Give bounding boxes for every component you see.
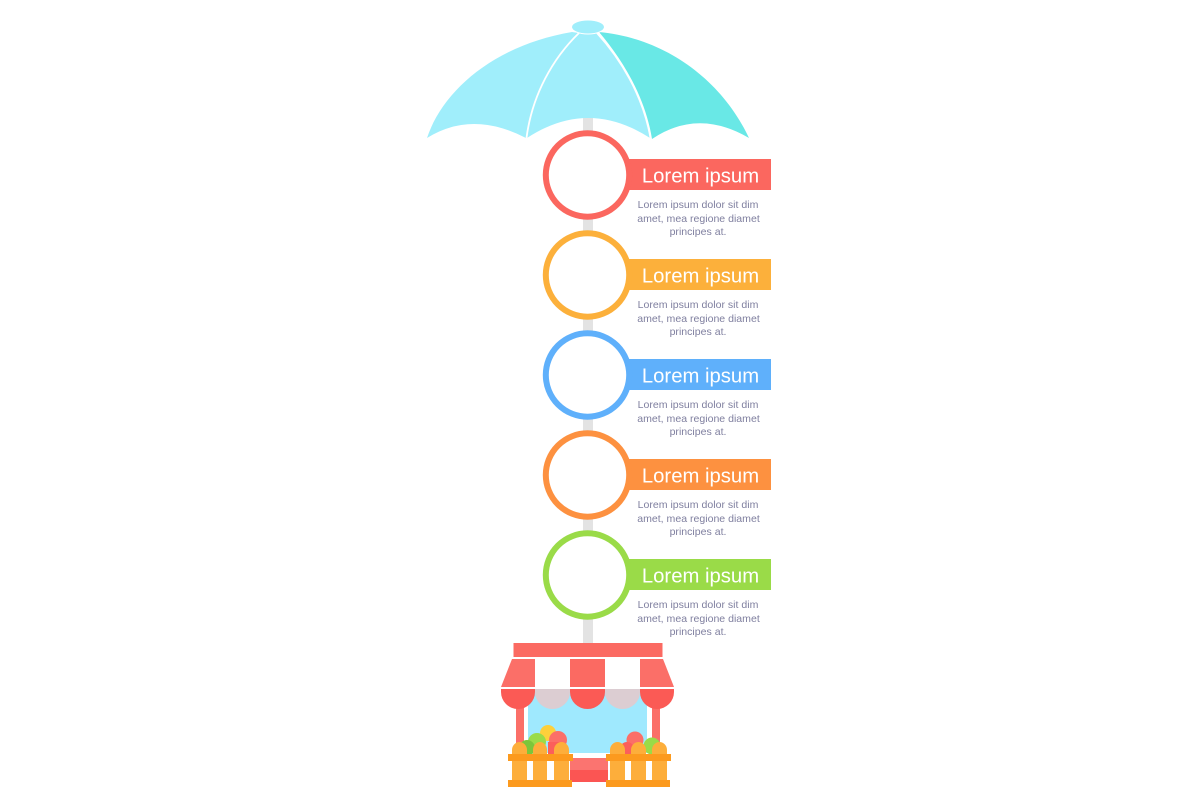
- step 4: [546, 433, 771, 538]
- ring: [546, 333, 629, 417]
- ring: [546, 433, 629, 517]
- umbrella top cap: [572, 20, 604, 34]
- description: principes at.: [670, 326, 726, 338]
- banner: [628, 559, 771, 590]
- description: amet, mea regione diamet: [637, 313, 760, 325]
- description: Lorem ipsum dolor sit dim: [638, 199, 759, 211]
- door step: [570, 758, 608, 782]
- description: principes at.: [670, 626, 726, 638]
- heading: Lorem ipsum: [642, 166, 759, 188]
- umbrella right panel: [599, 32, 749, 139]
- banner: [628, 259, 771, 290]
- umbrella seam left: [526, 33, 579, 138]
- description: Lorem ipsum dolor sit dim: [638, 499, 759, 511]
- step 2: [546, 233, 771, 338]
- right crate: [606, 742, 671, 787]
- description: principes at.: [670, 526, 726, 538]
- description: amet, mea regione diamet: [637, 413, 760, 425]
- heading: Lorem ipsum: [642, 366, 759, 388]
- left crate: [508, 742, 573, 787]
- pole: [583, 110, 593, 645]
- step 1: [546, 133, 771, 238]
- right fruit: [620, 732, 660, 756]
- description: amet, mea regione diamet: [637, 613, 760, 625]
- description: amet, mea regione diamet: [637, 213, 760, 225]
- icon: umbrella: [427, 20, 749, 139]
- heading: Lorem ipsum: [642, 466, 759, 488]
- umbrella centre panel: [527, 33, 650, 138]
- heading: Lorem ipsum: [642, 566, 759, 588]
- description: amet, mea regione diamet: [637, 513, 760, 525]
- window: [528, 690, 647, 753]
- umbrella seam right: [597, 33, 650, 138]
- icon: market stall: [501, 643, 674, 787]
- step 3: [546, 333, 771, 438]
- description: Lorem ipsum dolor sit dim: [638, 599, 759, 611]
- step 5: [546, 533, 771, 638]
- heading: Lorem ipsum: [642, 266, 759, 288]
- awning stripes: [501, 659, 535, 687]
- umbrella left panel: [427, 32, 579, 138]
- awning scallops: [501, 689, 535, 709]
- banner: [628, 159, 771, 190]
- left fruit: [519, 725, 567, 756]
- description: principes at.: [670, 426, 726, 438]
- stall posts: [516, 705, 524, 755]
- description: principes at.: [670, 226, 726, 238]
- description: Lorem ipsum dolor sit dim: [638, 399, 759, 411]
- ring: [546, 233, 629, 317]
- banner: [628, 459, 771, 490]
- description: Lorem ipsum dolor sit dim: [638, 299, 759, 311]
- ring: [546, 533, 629, 617]
- banner: [628, 359, 771, 390]
- ring: [546, 133, 629, 217]
- awning top bar: [514, 643, 662, 657]
